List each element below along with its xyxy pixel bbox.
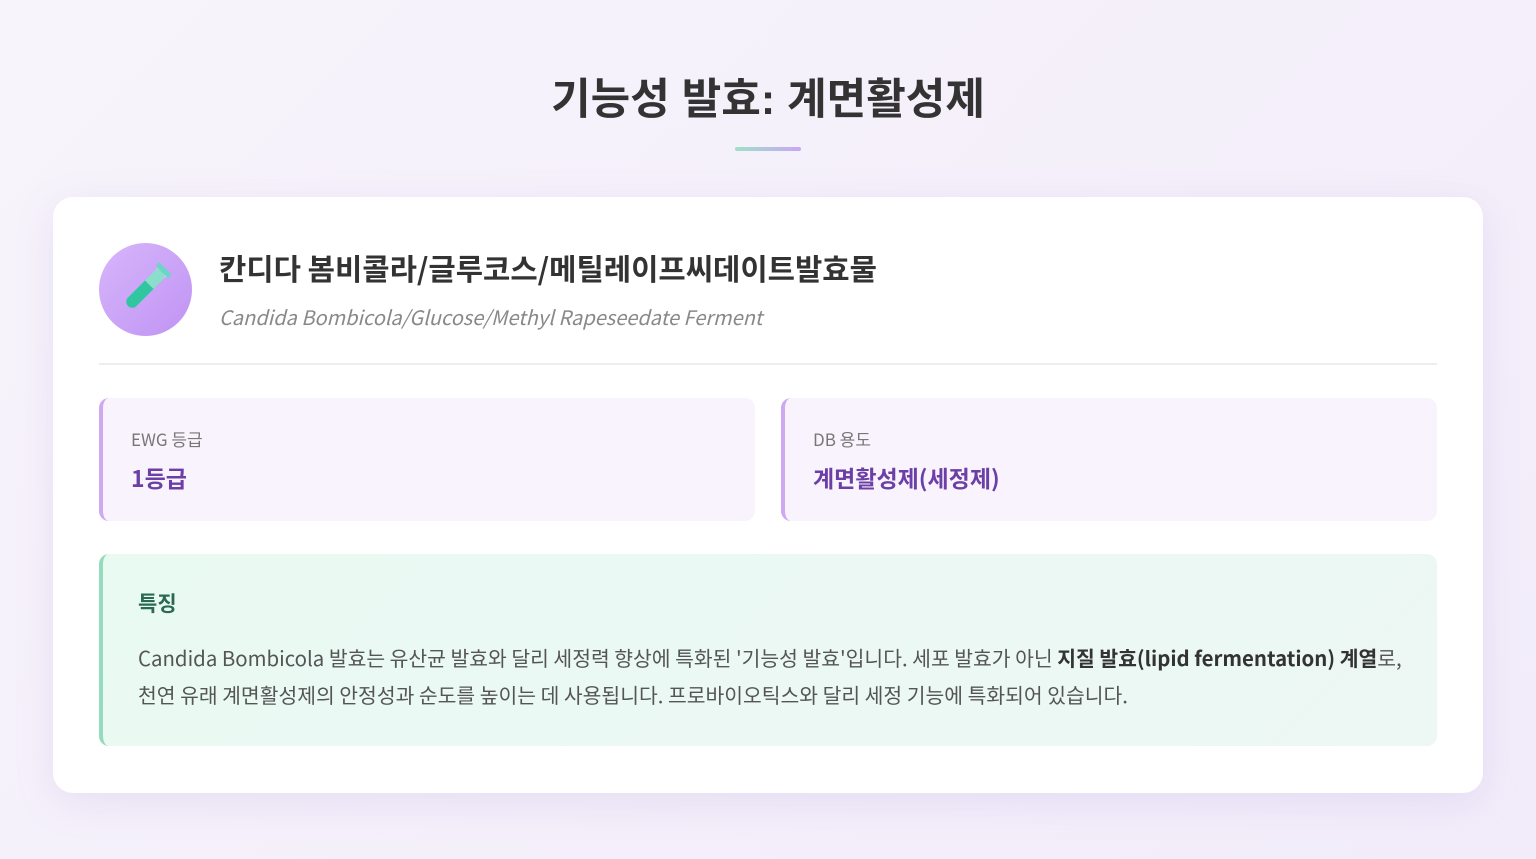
title underline — [735, 147, 801, 151]
panel: features — [99, 554, 1437, 746]
panel: main card — [53, 197, 1483, 793]
panel: features: Candida Bombicola 발효는 유산균 발효와 달리 세정력 향상에 특화된 '기능성 발효'입니다. 세포 발효가 아닌 지질 발효(lipid fermentation) 계열로, — [138, 642, 1402, 672]
panel: EWG grade: EWG 등급 — [131, 426, 203, 451]
panel: EWG grade: 1등급 — [131, 460, 187, 494]
panel: EWG grade — [99, 398, 755, 521]
english name: Candida Bombicola/Glucose/Methyl Rapeseedate Ferment — [219, 302, 762, 331]
panel: features: 특징 — [138, 588, 177, 618]
icon: test tube — [99, 243, 192, 336]
title: 기능성 발효: 계면활성제 — [551, 76, 985, 124]
panel: DB usage — [781, 398, 1437, 521]
ingredient name: 칸디다 봄비콜라/글루코스/메틸레이프씨데이트발효물 — [219, 246, 877, 289]
panel: DB usage: 계면활성제(세정제) — [813, 460, 1000, 494]
panel: features: 천연 유래 계면활성제의 안정성과 순도를 높이는 데 사용됩니다. 프로바이오틱스와 달리 세정 기능에 특화되어 있습니다. — [138, 679, 1128, 709]
panel: DB usage: DB 용도 — [813, 426, 871, 451]
